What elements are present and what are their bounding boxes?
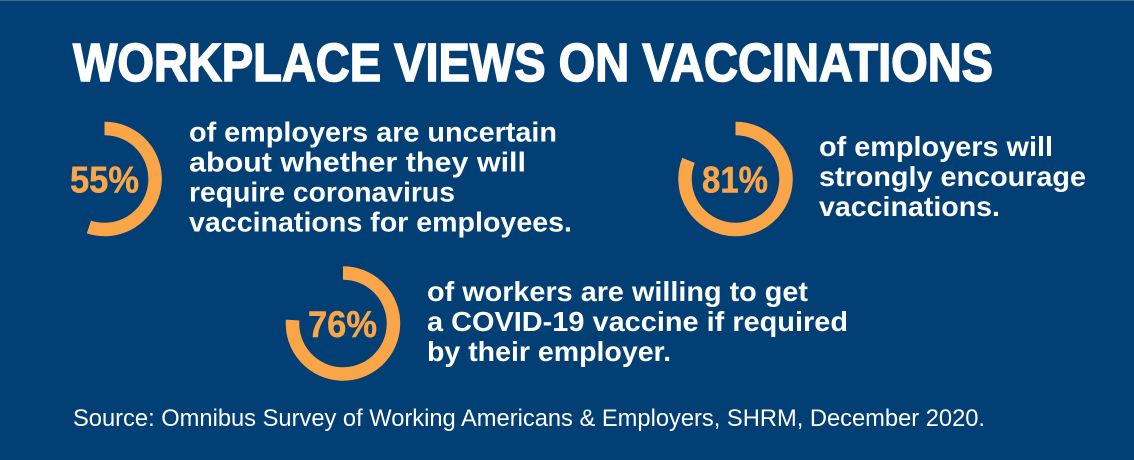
stat: 81% of employers encourage — [685, 128, 1086, 230]
text: 81% description: vaccinations. — [819, 191, 1000, 222]
source note: Source: Omnibus Survey of Working Americans & Employers, SHRM, December 2020. — [73, 405, 985, 432]
value: 55%: 55% — [70, 160, 139, 200]
text: 76% description: of workers are willing to get — [427, 276, 808, 307]
text: 76% description — [427, 276, 848, 367]
ring: 76% — [292, 273, 393, 374]
text: 81% description: of employers will — [819, 131, 1053, 162]
text: 81% description — [819, 131, 1086, 222]
text: 55% description: about whether they will — [189, 147, 526, 178]
stat: 55% of employers uncertain — [70, 117, 572, 238]
value: 76%: 76% — [308, 304, 377, 345]
ring: 55% — [89, 128, 155, 229]
text: 55% description: vaccinations for employees. — [189, 207, 572, 238]
text: 76% description: a COVID-19 vaccine if required — [427, 306, 848, 337]
stat: 76% of workers willing — [292, 273, 848, 374]
text: 81% description: strongly encourage — [819, 161, 1086, 192]
text: 55% description: of employers are uncertain — [189, 117, 557, 148]
text: 55% description: require coronavirus — [189, 177, 455, 208]
ring: 81% — [685, 128, 786, 230]
text: 76% description: by their employer. — [427, 336, 671, 367]
value: 81%: 81% — [702, 160, 768, 200]
title: WORKPLACE VIEWS ON VACCINATIONS — [73, 33, 993, 93]
text: 55% description — [189, 117, 572, 238]
